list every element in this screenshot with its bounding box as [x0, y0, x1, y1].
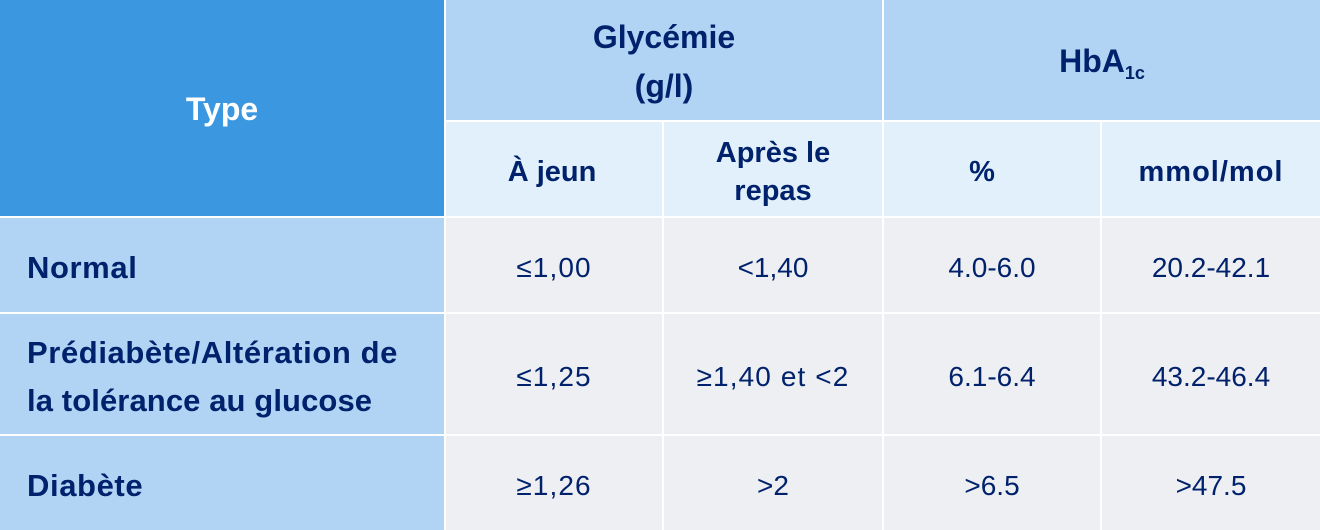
value: Prédiabète mmol/mol [1102, 314, 1320, 434]
header: Glycémie: Glycémie [593, 18, 735, 54]
subheader: À jeun [446, 122, 662, 216]
value: Diabète mmol/mol [1102, 436, 1320, 530]
row label: Prédiabète: la tolérance au glucose [27, 383, 372, 418]
value: Normal mmol/mol: 20.2-42.1 [1152, 252, 1270, 283]
subheader: Après le repas: Après le [716, 137, 830, 169]
subheader: À jeun: À jeun [508, 156, 596, 188]
value: Diabète fasting [446, 436, 662, 530]
subheader: mmol/mol [1102, 122, 1320, 216]
header: Glycémie: (g/l) [635, 68, 693, 104]
row label: Normal [0, 218, 444, 312]
value: Normal percent [884, 218, 1100, 312]
subheader: Après le repas: repas [734, 175, 812, 207]
value: Normal percent: 4.0-6.0 [948, 252, 1036, 283]
value: Diabète after meal [664, 436, 882, 530]
value: Prédiabète percent: 6.1-6.4 [948, 361, 1036, 392]
value: Diabète fasting: ≥1,26 [516, 470, 592, 501]
header: Type: Type [186, 91, 258, 127]
subheader: % [884, 122, 1100, 216]
value: Prédiabète fasting [446, 314, 662, 434]
value: Diabète percent [884, 436, 1100, 530]
value: Diabète after meal: >2 [757, 470, 789, 501]
header: HbA1c [884, 0, 1320, 120]
value: Prédiabète after meal: ≥1,40 et <2 [697, 361, 849, 392]
header: Type [0, 0, 444, 216]
value: Diabète mmol/mol: >47.5 [1176, 470, 1246, 501]
subheader: Après le repas [664, 122, 882, 216]
value: Prédiabète after meal [664, 314, 882, 434]
row label: Diabète: Diabète [27, 468, 143, 503]
value: Normal mmol/mol [1102, 218, 1320, 312]
row label: Prédiabète: Prédiabète/Altération de [27, 335, 398, 370]
row label: Normal: Normal [27, 250, 137, 285]
row label: Prédiabète [0, 314, 444, 434]
subheader: %: % [969, 156, 995, 188]
header: HbA1c: HbA1c [1059, 43, 1145, 83]
value: Prédiabète fasting: ≤1,25 [516, 361, 592, 392]
value: Normal after meal [664, 218, 882, 312]
value: Diabète percent: >6.5 [964, 470, 1020, 501]
subheader: mmol/mol: mmol/mol [1139, 156, 1283, 188]
value: Normal fasting [446, 218, 662, 312]
value: Prédiabète mmol/mol: 43.2-46.4 [1152, 361, 1270, 392]
value: Normal fasting: ≤1,00 [516, 252, 592, 283]
value: Normal after meal: <1,40 [738, 252, 808, 283]
value: Prédiabète percent [884, 314, 1100, 434]
row label: Diabète [0, 436, 444, 530]
header: Glycémie [446, 0, 882, 120]
